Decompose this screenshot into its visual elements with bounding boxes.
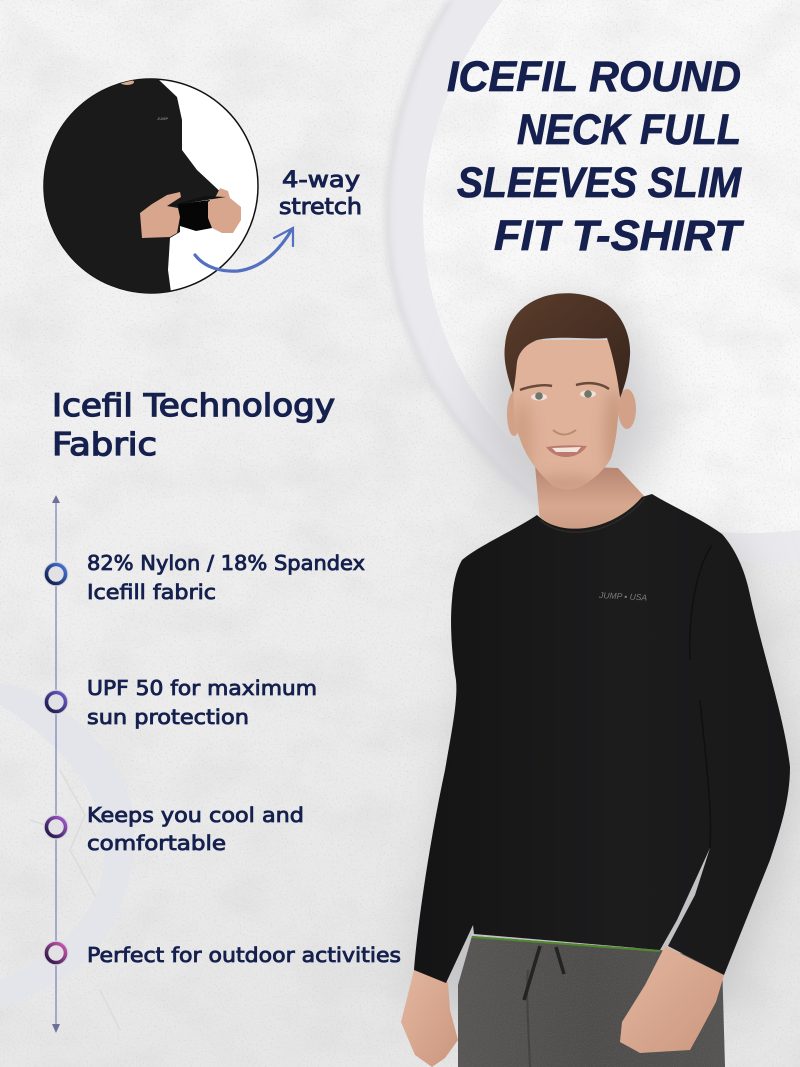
feature 4 — [44, 940, 401, 967]
inset: neck sliver — [120, 80, 134, 85]
inset: shirt — [44, 79, 219, 293]
model photo — [401, 293, 790, 1067]
model: right hand — [620, 946, 724, 1053]
feature 2 text: sun protection — [87, 705, 249, 729]
title: ICEFIL ROUND — [447, 53, 741, 101]
heading: Icefil Technology Fabric — [52, 388, 335, 463]
timeline dot 2 — [44, 690, 68, 714]
title: NECK FULL — [517, 106, 741, 154]
feature 3 text: comfortable — [87, 831, 226, 855]
feature 1 text: 82% Nylon / 18% Spandex — [87, 551, 365, 575]
feature 3 text: Keeps you cool and — [87, 803, 304, 827]
model: ears — [507, 389, 636, 436]
title — [447, 53, 745, 260]
heading: Icefil Technology Fabric: Fabric — [52, 427, 157, 463]
label: 4-way stretch: 4-way — [282, 168, 360, 193]
arrow: stretch — [195, 228, 293, 271]
feature 2 text: UPF 50 for maximum — [87, 676, 317, 700]
feature 1 text: Icefill fabric — [87, 580, 216, 604]
feature 3 — [44, 803, 304, 855]
feature 3 text — [87, 803, 304, 855]
title: SLEEVES SLIM — [457, 159, 742, 207]
inner bright disc behind title — [423, 0, 800, 534]
model: facial features — [520, 383, 609, 457]
model: shirt logo: JUMP ▪ USA — [598, 590, 648, 603]
timeline dot 3 — [44, 814, 68, 840]
inset circle: stretch demonstration — [43, 78, 259, 294]
model: left hand — [401, 970, 458, 1067]
timeline with end arrows — [52, 495, 60, 1033]
timeline dot 4 — [44, 940, 68, 966]
model: hair — [504, 293, 630, 398]
model: long sleeve shirt — [414, 494, 790, 983]
background: large crescent arc behind title — [387, 0, 800, 563]
label: 4-way stretch: stretch — [279, 195, 362, 220]
feature 2 — [44, 676, 317, 729]
heading: Icefil Technology Fabric: Icefil Technology — [52, 388, 335, 424]
inset: left hand — [140, 192, 181, 238]
background: lower-left crescent arc — [0, 683, 134, 1008]
inset: fist — [208, 188, 241, 233]
shadow behind model — [415, 300, 795, 1010]
model: neck — [535, 465, 645, 534]
inset: fabric pinch — [172, 196, 226, 206]
model: face — [512, 340, 625, 492]
feature 2 text — [87, 676, 317, 729]
inset: stretched fabric — [178, 200, 212, 231]
feature 1 — [44, 551, 365, 604]
feature 4 text: Perfect for outdoor activities — [87, 943, 401, 967]
timeline dot 1 — [44, 562, 68, 586]
feature 1 text — [87, 551, 365, 604]
title: FIT T-SHIRT — [494, 212, 745, 260]
inset: shirt logo: JUMP — [157, 116, 168, 121]
label: 4-way stretch — [279, 168, 362, 220]
model: trousers — [455, 930, 730, 1067]
